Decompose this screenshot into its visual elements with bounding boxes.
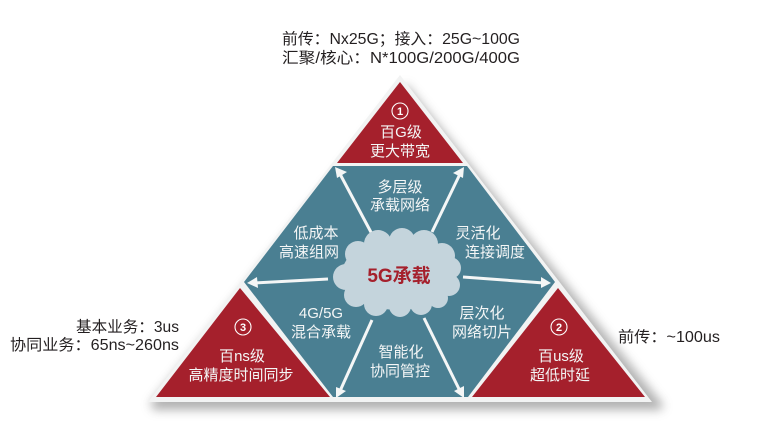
hexagon label: flexible: 连接调度 [465, 244, 525, 261]
arrow: right [463, 277, 551, 288]
text: top annotation [282, 30, 520, 67]
icon: number 2 [551, 319, 567, 335]
hexagon label: intelligent: 智能化 [378, 343, 424, 361]
icon: number 3 [235, 319, 251, 335]
pyramid white base [148, 75, 652, 402]
text: top annotation: 汇聚/核心：N*100G/200G/400G [282, 49, 520, 67]
hexagon label: low cost: 高速组网 [279, 244, 339, 261]
icon: number 3: 3 [240, 322, 246, 334]
text: left annotation: 协同业务：65ns~260ns [10, 336, 179, 354]
icon: center cloud [333, 228, 461, 317]
text: right annotation: 前传：~100us [618, 328, 720, 346]
hexagon label: 4G/5G: 混合承载 [291, 324, 351, 341]
hexagon label: multilayer [370, 179, 430, 214]
text: top annotation: 前传：Nx25G；接入：25G~100G [282, 30, 520, 48]
hexagon label: slicing: 层次化 [459, 305, 505, 322]
panel: top red triangle [337, 82, 463, 163]
arrow: up right [432, 167, 464, 232]
icon: number 1: 1 [397, 106, 403, 118]
pyramid shadow [150, 84, 664, 410]
hexagon label: flexible [455, 225, 525, 261]
arrow: down right [424, 318, 464, 398]
hexagon label: intelligent [370, 343, 430, 380]
heading: top triangle: 百G级 [380, 124, 422, 141]
hexagon label: slicing: 网络切片 [452, 324, 512, 341]
text: left triangle: 高精度时间同步 [188, 367, 294, 384]
arrow: down left [336, 320, 372, 398]
panel: right red triangle [472, 288, 645, 397]
hexagon label: intelligent: 协同管控 [370, 363, 430, 380]
hexagon label: slicing [452, 305, 512, 341]
text: top triangle: 更大带宽 [370, 143, 430, 160]
hexagon label: low cost: 低成本 [293, 225, 339, 242]
arrow: up left [335, 167, 373, 236]
icon: number 2: 2 [556, 322, 562, 334]
hexagon label: 4G/5G [291, 305, 351, 341]
hexagon label: multilayer: 承载网络 [370, 197, 430, 214]
text: left annotation: 基本业务：3us [76, 318, 179, 336]
panel: left red triangle [156, 288, 330, 397]
hexagon label: 4G/5G: 4G/5G [299, 305, 343, 322]
text: left annotation [10, 318, 179, 354]
panel: central hexagon [244, 166, 555, 397]
hexagon label: multilayer: 多层级 [377, 179, 423, 196]
text: right triangle: 超低时延 [530, 367, 590, 384]
heading: right triangle: 百us级 [538, 348, 584, 365]
heading: left triangle: 百ns级 [219, 348, 265, 365]
arrow: left [247, 277, 328, 288]
heading: 5G bearer: 5G承载 [367, 265, 431, 287]
hexagon label: flexible: 灵活化 [455, 225, 501, 242]
hexagon label: low cost [279, 225, 339, 261]
